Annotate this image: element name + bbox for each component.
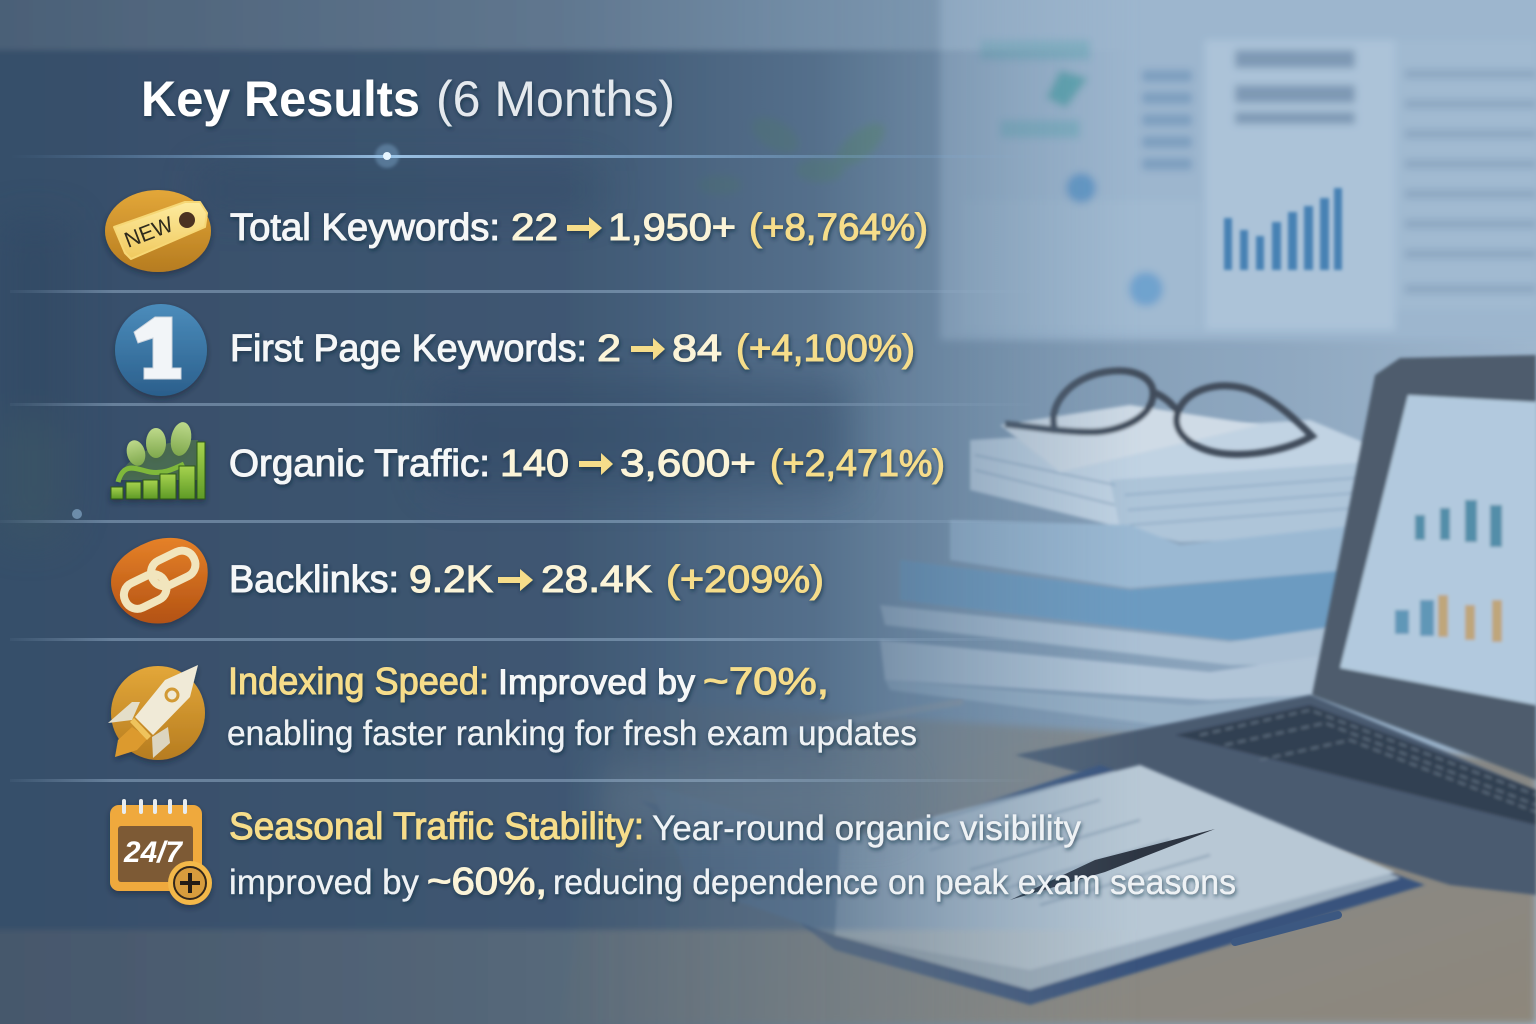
text: backlinks metric: [229, 559, 824, 601]
text: seasonal stability description: improved by: [229, 863, 419, 902]
laptop: [1015, 355, 1536, 895]
icon: chain link: [111, 538, 208, 624]
icon: 24/7 calendar: 24/7: [123, 836, 183, 869]
text: organic traffic metric: [229, 443, 945, 485]
icon: new tag: [105, 190, 211, 272]
text: total keywords metric: (+8,764%): [749, 207, 928, 249]
text: total keywords metric: [230, 207, 928, 249]
text: seasonal stability description: Year-round organic visibility: [652, 809, 1081, 848]
text: indexing speed description: ~70%,: [703, 661, 829, 703]
row: backlinks: [111, 538, 824, 624]
text: total keywords metric: 1,950+: [608, 207, 736, 249]
text: organic traffic metric: 140: [500, 443, 569, 485]
text: indexing speed description: enabling faster ranking for fresh exam updates: [227, 714, 917, 753]
text: first page keywords metric: 2: [597, 328, 621, 370]
glasses on papers: [1000, 371, 1312, 472]
text: first page keywords metric: (+4,100%): [736, 328, 915, 370]
text: indexing speed description: [227, 661, 917, 753]
row: indexing speed: [108, 661, 917, 760]
text: indexing speed description: Indexing Speed:: [228, 661, 489, 703]
text: seasonal stability description: ~60%,: [427, 861, 547, 903]
text: first page keywords metric: [230, 328, 915, 370]
text: organic traffic metric: Organic Traffic:: [229, 443, 490, 485]
title divider with glow: [10, 144, 1040, 168]
title: (6 Months): [436, 71, 675, 127]
row: total keywords: [105, 190, 928, 272]
book stack: [880, 420, 1382, 725]
wall dashboards: [940, 0, 1536, 340]
text: backlinks metric: 28.4K: [541, 559, 652, 601]
row: first page keywords: [115, 304, 915, 396]
text: total keywords metric: Total Keywords:: [230, 207, 500, 249]
icon: new tag: NEW: [121, 211, 177, 253]
translucent left overlay panel: [0, 0, 1140, 1024]
pens: [770, 702, 1338, 942]
blurred background shapes behind the panel: [0, 170, 900, 830]
text: organic traffic metric: 3,600+: [620, 443, 756, 485]
plant: [698, 110, 891, 195]
open notebook: [640, 765, 1425, 1005]
row: organic traffic: [111, 421, 945, 499]
desk surface: [560, 700, 1536, 1024]
icon: green growth chart with leaves: [111, 421, 205, 499]
text: seasonal stability description: [229, 806, 1236, 903]
chart bars: [1224, 188, 1342, 270]
text: total keywords metric: 22: [511, 207, 558, 249]
text: indexing speed description: Improved by: [498, 663, 696, 702]
text: backlinks metric: Backlinks:: [229, 559, 399, 601]
soft haze over photo: [700, 0, 1536, 1024]
title: Key Results: [141, 71, 420, 127]
text: seasonal stability description: Seasonal Traffic Stability:: [229, 806, 644, 848]
text: first page keywords metric: First Page Keywords:: [230, 328, 587, 370]
icon: rocket: [108, 665, 205, 760]
text: backlinks metric: (+209%): [666, 559, 824, 601]
icon: number one: [115, 304, 207, 396]
text: backlinks metric: 9.2K: [409, 559, 493, 601]
row dividers: [0, 290, 1060, 782]
text: seasonal stability description: reducing dependence on peak exam seasons: [553, 863, 1236, 902]
row: seasonal traffic stability: [110, 801, 1236, 905]
text: first page keywords metric: 84: [672, 328, 722, 370]
icon: 24/7 calendar: [110, 801, 212, 905]
text: organic traffic metric: (+2,471%): [770, 443, 945, 485]
title: [141, 71, 675, 127]
